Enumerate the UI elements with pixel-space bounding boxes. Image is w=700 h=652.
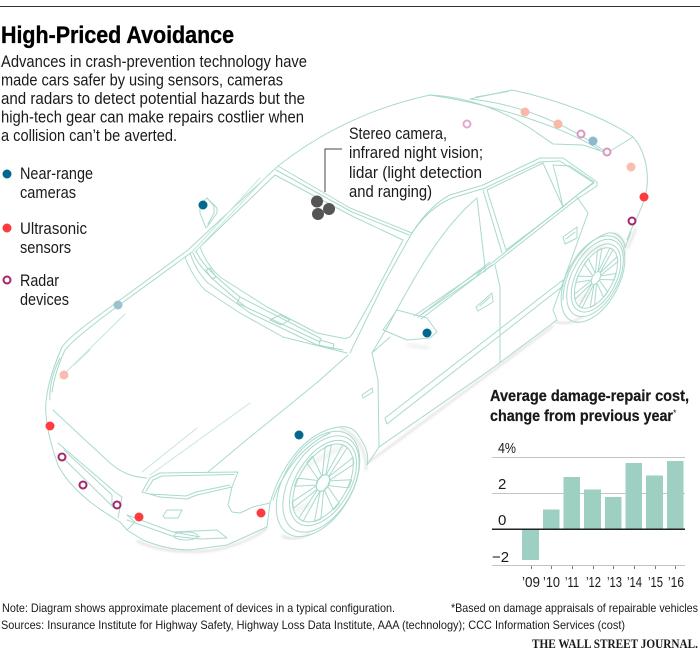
callout label [349, 125, 483, 201]
bars [522, 461, 684, 560]
legend: radar devices: devices [20, 291, 69, 309]
y axis labels: −2 [492, 549, 509, 566]
stereo camera callout [311, 125, 483, 220]
front wheel [259, 417, 379, 551]
x axis labels: ’16 [668, 574, 684, 591]
x axis labels: ’14 [627, 574, 642, 591]
intro text: made cars safer by using sensors, cameras [1, 70, 283, 90]
legend: near-range cameras [2, 165, 93, 202]
x axis labels: ’13 [607, 574, 622, 591]
chart title asterisk: * [673, 408, 677, 418]
callout label: lidar (light detection [349, 164, 482, 182]
chart title: Average damage-repair cost, [490, 388, 689, 405]
legend: ultrasonic sensors: Ultrasonic [20, 220, 87, 238]
y axis labels: 2 [498, 476, 506, 493]
side windows and doors [362, 158, 597, 447]
intro text [1, 52, 307, 145]
windshield and wipers [185, 166, 412, 353]
intro text: high-tech gear can make repairs costlier when [1, 108, 304, 126]
x axis labels: ’10 [543, 574, 560, 591]
y axis labels: 4% [498, 440, 516, 457]
intro text: and radars to detect potential hazards but the [1, 89, 305, 108]
car illustration [46, 90, 647, 552]
right mirror [372, 262, 492, 353]
hood and front bumper [46, 250, 348, 550]
leader line [325, 149, 342, 192]
chart title [490, 388, 689, 425]
callout label: infrared night vision; [349, 144, 483, 162]
legend: ultrasonic sensors [2, 220, 87, 257]
legend: near-range cameras: Near-range [20, 165, 93, 183]
x axis labels [522, 574, 684, 591]
rear wheel [548, 225, 638, 333]
near-range camera markers [114, 136, 598, 440]
x axis labels: ’11 [565, 574, 579, 591]
title: High-Priced Avoidance [1, 22, 234, 49]
legend: near-range cameras: cameras [20, 184, 76, 202]
y axis labels: 0 [498, 512, 506, 529]
top rule [0, 6, 700, 7]
ultrasonic sensor markers [46, 108, 648, 522]
radar device markers [58, 120, 636, 508]
bar chart: average damage-repair cost [490, 388, 689, 591]
intro text: Advances in crash-prevention technology have [1, 52, 307, 71]
callout label: and ranging) [349, 183, 432, 201]
y axis labels [492, 440, 516, 566]
footnotes [1, 601, 698, 632]
legend [2, 165, 93, 309]
sources: Sources: Insurance Institute for Highway Safety, Highway Loss Data Institute, AAA (technology); CCC Information Services (cost) [1, 618, 625, 632]
stereo sensors [311, 196, 335, 220]
x axis labels: ’12 [586, 574, 601, 591]
x axis labels: ’09 [522, 574, 540, 591]
left mirror [200, 198, 217, 228]
gridlines [492, 457, 685, 566]
legend: radar devices: Radar [20, 272, 59, 290]
zero line [492, 528, 685, 530]
legend: ultrasonic sensors: sensors [20, 239, 71, 257]
car shadows [137, 228, 636, 552]
chart title: change from previous year [490, 408, 673, 425]
note: Note: Diagram shows approximate placement of devices in a typical configuration. [2, 601, 395, 615]
body outline: roof and trunk [188, 90, 647, 250]
callout label: Stereo camera, [349, 125, 447, 143]
x axis ticks [531, 566, 676, 569]
x axis labels: ’15 [648, 574, 663, 591]
legend: radar devices [4, 272, 69, 309]
intro text: a collision can’t be averted. [1, 126, 177, 145]
